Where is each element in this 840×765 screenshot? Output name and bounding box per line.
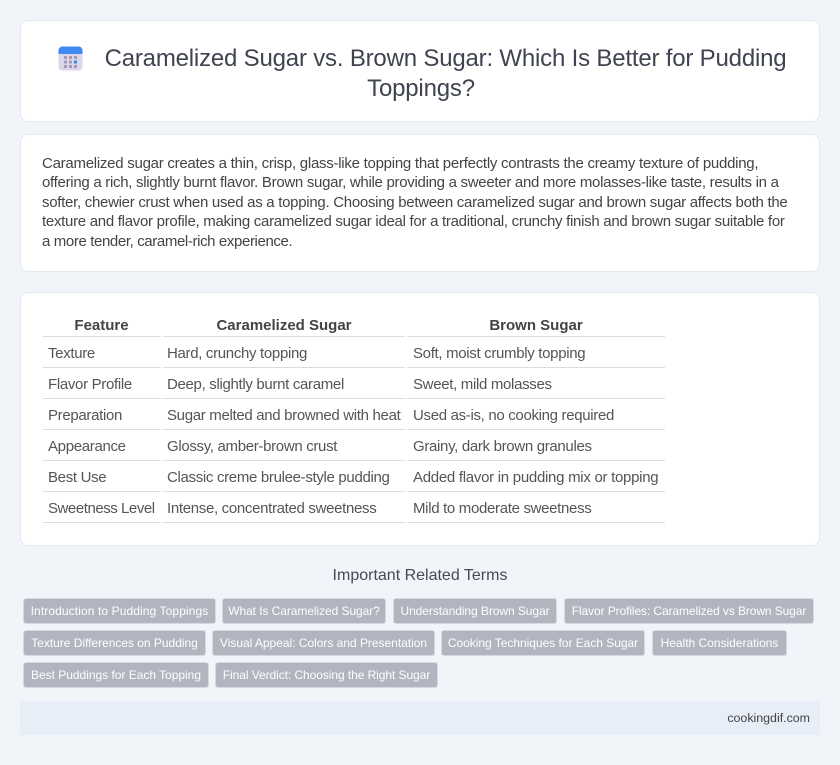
- table row: preparation: Used as-is, no cooking required: [413, 407, 614, 424]
- table row: best use: Added flavor in pudding mix or topping: [413, 469, 658, 486]
- table row: appearance: [43, 438, 665, 461]
- tag: [212, 630, 435, 656]
- table header: Caramelized Sugar: [216, 317, 352, 334]
- tag: Cooking Techniques for Each Sugar: [448, 636, 638, 650]
- table row: best use: Classic creme brulee-style pudding: [167, 469, 390, 486]
- icon: calendar: [58, 46, 82, 70]
- text block: introduction: offering a rich, slightly burnt flavor. Brown sugar, while providing a sweeter and more molasses-like taste, results in a: [42, 174, 779, 191]
- table row: sweetness level: Mild to moderate sweetness: [413, 500, 591, 517]
- tag: Best Puddings for Each Topping: [31, 668, 201, 682]
- table header: [43, 317, 665, 337]
- text block: introduction: softer, chewier crust when used as a topping. Choosing between caramelized sugar and brown sugar affects both the: [42, 194, 787, 210]
- table row: flavor profile: Sweet, mild molasses: [413, 376, 552, 393]
- tag: [441, 630, 645, 656]
- text block: introduction: Caramelized sugar creates a thin, crisp, glass-like topping that perfectly contrasts the creamy texture of pudding,: [42, 154, 758, 172]
- table row: texture: Texture: [48, 345, 95, 362]
- table row: preparation: [43, 407, 665, 430]
- tag: [23, 598, 216, 624]
- heading: important related terms: Important Related Terms: [333, 567, 507, 584]
- table row: preparation: Preparation: [48, 407, 122, 424]
- text block: introduction: a more tender, caramel-rich experience.: [42, 232, 292, 250]
- tag: What Is Caramelized Sugar?: [228, 604, 380, 618]
- panel: comparison table: [20, 292, 820, 546]
- tag: [564, 598, 814, 624]
- footer source text: cookingdif.com: [727, 711, 810, 725]
- table row: sweetness level: [43, 500, 665, 523]
- tag: [23, 662, 209, 688]
- tag: Texture Differences on Pudding: [31, 636, 198, 650]
- tag: Final Verdict: Choosing the Right Sugar: [223, 668, 430, 682]
- table row: texture: Soft, moist crumbly topping: [413, 345, 585, 362]
- table row: sweetness level: Sweetness Level: [48, 500, 155, 517]
- table row: best use: [43, 469, 665, 492]
- tag: Health Considerations: [661, 636, 778, 650]
- table row: texture: [43, 345, 665, 368]
- table row: appearance: Glossy, amber-brown crust: [167, 438, 337, 455]
- panel: title header: [20, 20, 820, 122]
- table row: appearance: Appearance: [48, 438, 126, 455]
- tag: [652, 630, 787, 656]
- tag list: related terms: [23, 598, 814, 688]
- text block: introduction: texture and flavor profile, making caramelized sugar ideal for a traditional, crunchy finish and brown sugar suitable for: [42, 213, 785, 230]
- table header: Brown Sugar: [489, 317, 583, 334]
- tag: Introduction to Pudding Toppings: [31, 604, 208, 618]
- tag: [215, 662, 438, 688]
- table row: appearance: Grainy, dark brown granules: [413, 438, 592, 455]
- tag: [222, 598, 386, 624]
- tag: [393, 598, 557, 624]
- text block: introduction: [42, 154, 788, 250]
- tag: Flavor Profiles: Caramelized vs Brown Sugar: [572, 604, 806, 618]
- table row: flavor profile: Deep, slightly burnt caramel: [167, 376, 344, 393]
- table row: preparation: Sugar melted and browned with heat: [167, 407, 400, 424]
- tag: [23, 630, 206, 656]
- title: [105, 45, 786, 102]
- title: Caramelized Sugar vs. Brown Sugar: Which Is Better for Pudding: [105, 45, 786, 72]
- tag: Understanding Brown Sugar: [400, 604, 550, 618]
- table row: texture: Hard, crunchy topping: [167, 345, 307, 362]
- tag: Visual Appeal: Colors and Presentation: [220, 636, 427, 650]
- footer bar: [20, 701, 820, 735]
- table header: Feature: [74, 317, 129, 334]
- panel: introduction paragraph: [20, 134, 820, 272]
- title: Toppings?: [367, 75, 475, 102]
- table row: sweetness level: Intense, concentrated sweetness: [167, 500, 376, 517]
- table row: flavor profile: [43, 376, 665, 399]
- table row: flavor profile: Flavor Profile: [48, 376, 132, 393]
- table row: best use: Best Use: [48, 469, 106, 486]
